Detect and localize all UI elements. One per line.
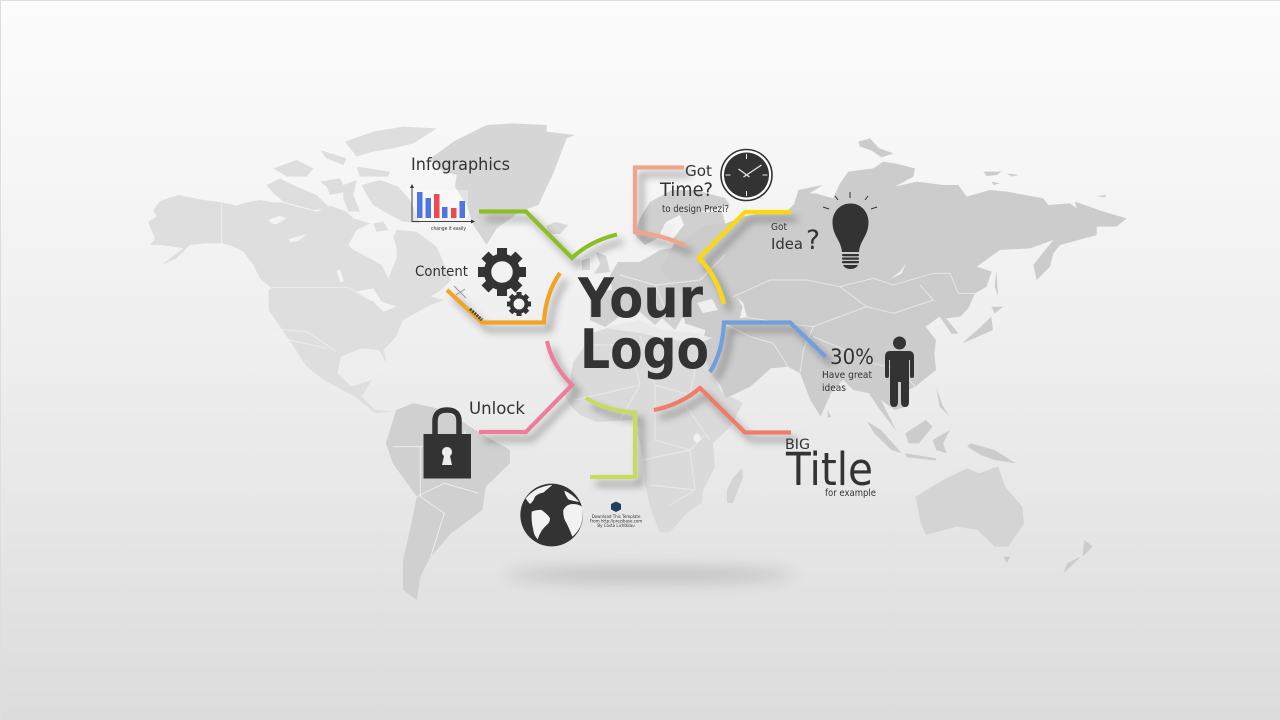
icon: tiny plane and marks on orange line	[454, 286, 482, 320]
label: to design Prezi?: to design Prezi?	[662, 204, 729, 215]
panel: infographics	[410, 155, 510, 232]
stat: 30%: 30%	[830, 345, 874, 369]
map: North America	[148, 127, 451, 413]
connector: orange content	[447, 273, 560, 322]
text: Have great ideas: ideas	[822, 383, 846, 394]
center title: Your Logo: Logo	[580, 318, 709, 381]
label: Got: Got	[771, 222, 787, 233]
panel: time	[659, 150, 772, 215]
label: question mark: ?	[806, 225, 820, 256]
label: Time?: Time?	[659, 179, 713, 201]
text: Have great ideas: Have great	[822, 370, 872, 381]
map: South America	[386, 403, 510, 600]
text: download credit: By Costa Lichtblau	[597, 523, 635, 528]
map: Africa	[565, 327, 743, 533]
map: Madagascar	[727, 468, 743, 503]
connector: lime world	[586, 398, 635, 477]
world map	[148, 123, 1127, 600]
floor shadow	[505, 568, 795, 582]
map: Lake Victoria	[694, 434, 700, 442]
label: Content: Content	[415, 264, 468, 280]
text: download credit: From http://prezibase.com	[590, 518, 642, 524]
icon: globe	[520, 484, 583, 546]
icon: clock	[721, 150, 772, 200]
panel: idea	[771, 192, 877, 269]
label: Title: Title	[785, 443, 873, 496]
connector: green infographics	[479, 212, 617, 258]
connector: yellow idea	[699, 212, 791, 304]
text: Have great ideas	[822, 370, 872, 394]
map: inner seas and borders	[575, 224, 725, 505]
label: BIG: BIG	[785, 437, 810, 453]
label: Unlock: Unlock	[469, 399, 525, 419]
text: download credit	[590, 514, 642, 528]
panel: 30 percent	[822, 336, 914, 407]
icon: small logo	[611, 502, 621, 512]
connector lines	[447, 168, 826, 477]
map: Eurasia	[661, 138, 1127, 432]
panel: content	[415, 248, 531, 320]
map: Iceland	[546, 222, 568, 234]
map: British Isles	[582, 252, 610, 274]
map: Scandinavia	[634, 190, 730, 248]
connector: pink unlock	[479, 341, 572, 432]
label: for example: for example	[825, 488, 876, 499]
map: Greenland	[430, 123, 575, 245]
icon: padlock	[424, 410, 471, 478]
text: download credit: Download This Template	[592, 514, 641, 519]
heading: Infographics: Infographics	[411, 155, 510, 175]
map: Asian islands and Oceania	[736, 185, 1093, 573]
center title: Your Logo: Your	[577, 267, 703, 330]
connector: coral title	[654, 388, 791, 432]
panel: big title	[785, 437, 876, 499]
center title: Your Logo	[577, 267, 709, 381]
icon: large gear	[478, 248, 526, 296]
map: Europe	[590, 240, 725, 330]
panel: unlock	[424, 399, 525, 478]
bar chart: change it easily	[431, 226, 466, 232]
icon: small gear	[507, 292, 531, 316]
label: Got: Got	[685, 162, 712, 180]
icon: light bulb	[823, 192, 877, 269]
connector: blue 30 percent	[710, 322, 826, 372]
credit block	[590, 502, 642, 528]
icon: person	[885, 336, 914, 407]
connector: salmon time	[635, 168, 686, 246]
label: Idea: Idea	[771, 235, 803, 253]
